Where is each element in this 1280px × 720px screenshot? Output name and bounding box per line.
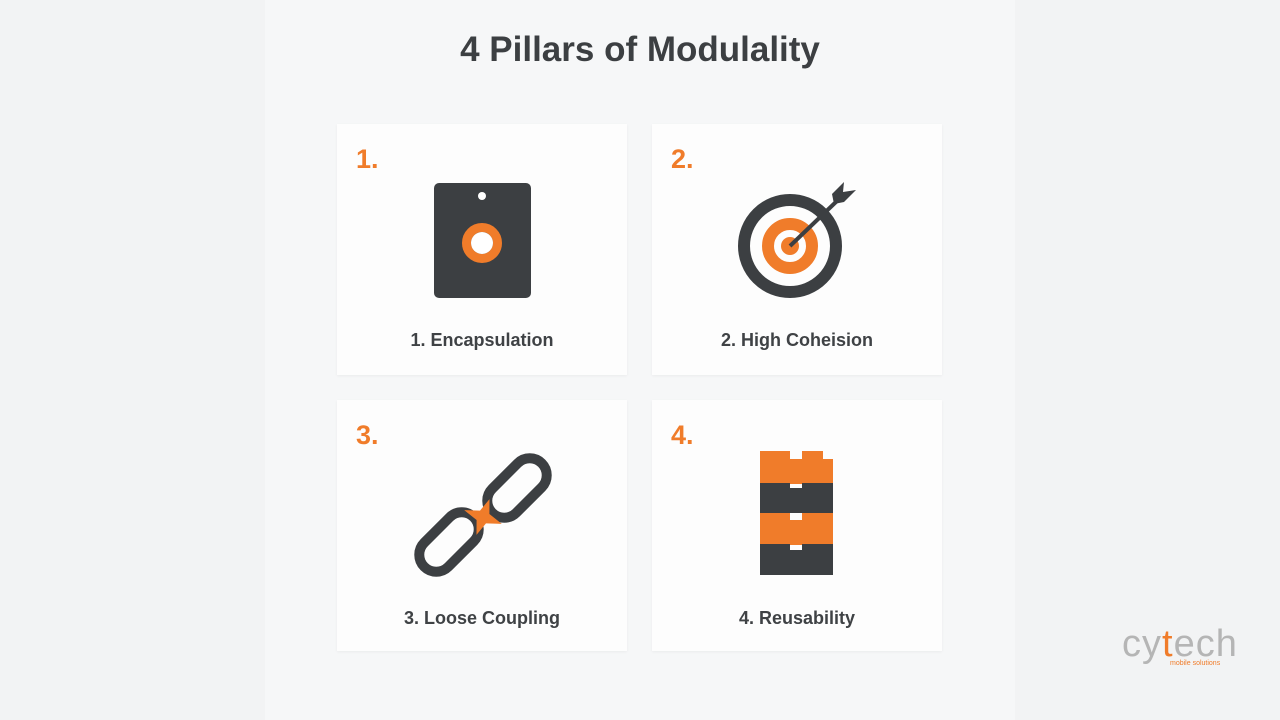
panel: reusability: [652, 400, 942, 651]
logo: mobile solutions: [1170, 660, 1220, 667]
panel: high cohesion: 2. High Coheision: [721, 330, 873, 350]
icon: target: [738, 182, 856, 298]
logo: cytech: [1122, 623, 1238, 665]
panel: high cohesion: 2.: [671, 144, 694, 174]
panel: high cohesion: [652, 124, 942, 375]
panel: encapsulation: 1. Encapsulation: [410, 330, 554, 350]
panel: encapsulation: 1.: [356, 144, 379, 174]
icon: stacked blocks: [760, 451, 833, 575]
panel: loose coupling: 3. Loose Coupling: [404, 608, 560, 628]
panel: reusability: 4. Reusability: [739, 608, 855, 628]
panel: encapsulation: [337, 124, 627, 375]
panel: loose coupling: 3.: [356, 420, 379, 450]
icon: capsule box: [434, 183, 531, 298]
icon: broken chain: [414, 453, 552, 577]
panel: reusability: 4.: [671, 420, 694, 450]
panel: loose coupling: [337, 400, 627, 651]
title: 4 Pillars of Modulality: [460, 30, 820, 69]
